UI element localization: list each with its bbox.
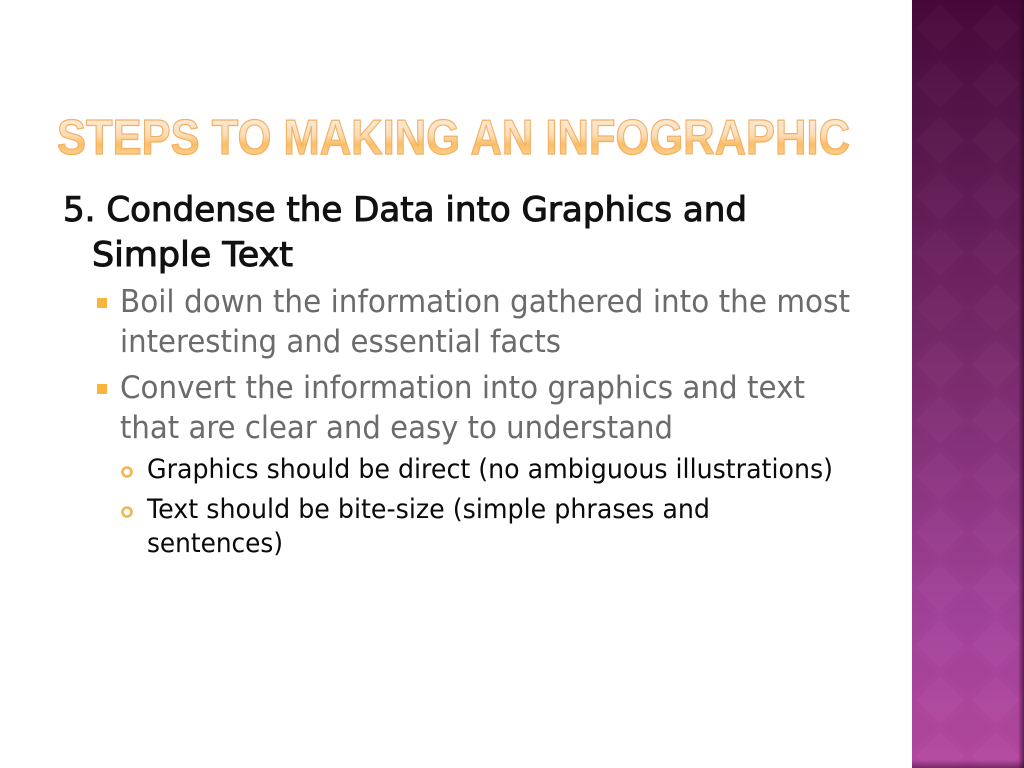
text block: boil down: Boil down the information gathered into the most [120, 284, 850, 320]
text block: convert: Convert the information into graphics and text [120, 370, 805, 406]
icon: ring bullet [122, 468, 132, 476]
text: graphics: Graphics should be direct (no ambiguous illustrations) [147, 454, 833, 485]
text: bite-size: sentences) [147, 528, 283, 559]
text: bite-size [146, 494, 710, 559]
icon: ring bullet [122, 508, 132, 516]
text block: boil down: interesting and essential facts [120, 324, 561, 360]
sub-bullet: text should be bite-size [122, 494, 710, 559]
heading: step 5: 5. Condense the Data into Graphics and [63, 190, 747, 230]
text: bite-size: Text should be bite-size (simple phrases and [146, 494, 710, 525]
bullet: convert the information [97, 370, 805, 446]
heading: step 5: Simple Text [92, 235, 293, 275]
text block: convert [120, 370, 805, 446]
heading: step 5 [63, 190, 747, 275]
text block: convert: that are clear and easy to understand [120, 410, 673, 446]
panel: purple sidebar [912, 0, 1024, 768]
title: STEPS TO MAKING AN INFOGRAPHIC [57, 111, 850, 165]
text block: boil down [120, 284, 850, 360]
sub-bullet: graphics should be direct [122, 454, 833, 485]
bullet: boil down the information [97, 284, 850, 360]
icon: square bullet [97, 384, 107, 394]
icon: square bullet [97, 298, 107, 308]
